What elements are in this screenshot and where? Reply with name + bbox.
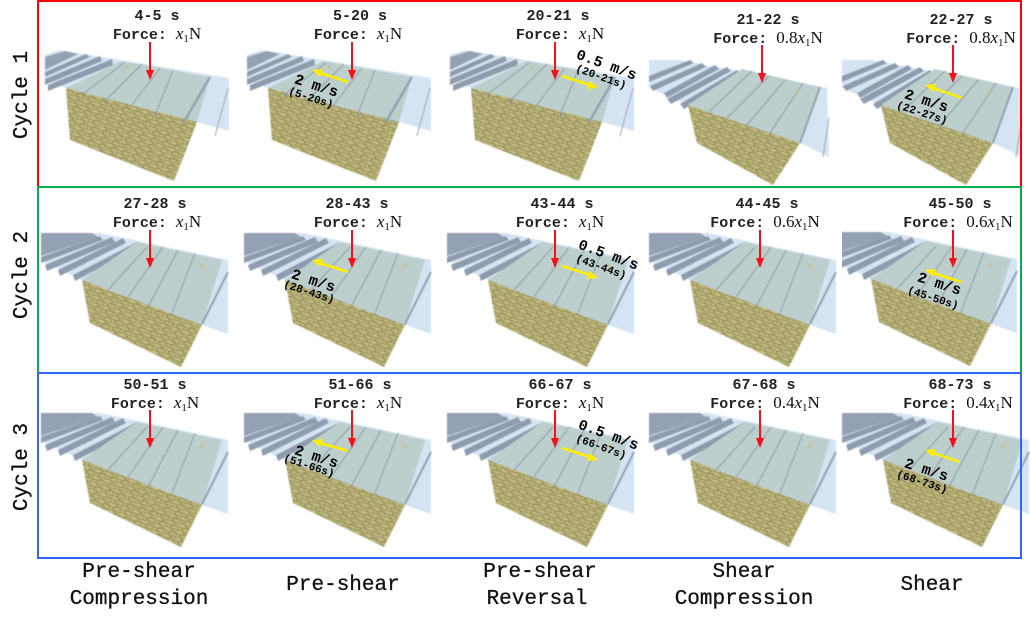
label: 5-20 s [314, 8, 402, 45]
label: 20-21 s [516, 8, 604, 45]
shear arrow 20-21 s [562, 47, 639, 93]
row label: cycle 2: Cycle 2 [11, 231, 34, 319]
label: 22-27 s: 22-27 s [929, 12, 993, 29]
label: 20-21 s: 20-21 s [526, 8, 590, 25]
border: cycle 1 [38, 1, 1021, 187]
label: 21-22 s: 1 [805, 37, 811, 49]
label: 45-50 s [903, 196, 1013, 233]
label: 28-43 s [314, 196, 402, 233]
label: 28-43 s: N [390, 212, 402, 231]
shear arrow 28-43 s [282, 259, 348, 307]
label: 66-67 s: Force: x [516, 393, 586, 413]
label: 5-20 s: Force: x [314, 24, 384, 44]
label: cycle 1 timing and force 4-5 s: Force: x [113, 24, 183, 44]
label: 21-22 s [713, 12, 823, 49]
column label: shear: Shear [900, 574, 964, 597]
force arrow 3 [551, 42, 559, 80]
row label: cycle 1: Cycle 1 [11, 51, 34, 139]
shear arrow 43-44 s: 0.5 m/s [576, 237, 641, 274]
label: cycle 1 timing and force 4-5 s [113, 8, 201, 45]
force arrow 1 [146, 42, 154, 80]
shear arrow 20-21 s: 0.5 m/s [574, 47, 639, 84]
border: cycle 2 [38, 187, 1021, 373]
label: 28-43 s: 1 [384, 221, 390, 233]
label: 68-73 s: 68-73 s [928, 377, 992, 394]
column label: pre-shear compression: Compression [70, 588, 208, 611]
label: 67-68 s: N [808, 393, 820, 412]
label: 5-20 s: 1 [384, 33, 390, 45]
label: 51-66 s: Force: x [314, 393, 384, 413]
label: 27-28 s: 1 [183, 221, 189, 233]
shear arrow 43-44 s [562, 237, 641, 283]
scene 66-67 s [447, 413, 634, 547]
scene 68-73 s [842, 413, 1029, 547]
force arrow 3 [551, 230, 559, 268]
shear arrow 66-67 s [562, 417, 641, 463]
label: 68-73 s: 1 [995, 402, 1001, 414]
label: 45-50 s: Force: 0.6x [903, 212, 995, 232]
border: cycle 3 [38, 373, 1021, 558]
label: 44-45 s: 44-45 s [735, 196, 799, 213]
shear arrow 22-27 s: (22-27s) [895, 100, 949, 128]
row label: cycle 3: Cycle 3 [11, 423, 34, 511]
label: 51-66 s: 1 [384, 402, 390, 414]
force arrow 2 [348, 230, 356, 268]
label: 27-28 s: Force: x [113, 212, 183, 232]
label: 22-27 s [906, 12, 1016, 49]
label: 27-28 s: 27-28 s [123, 196, 187, 213]
shear arrow 22-27 s [895, 84, 962, 128]
shear arrow 51-66 s: (51-66s) [282, 453, 336, 481]
column label: shear compression: Shear [712, 561, 776, 584]
label: 28-43 s: Force: x [314, 212, 384, 232]
scene 21-22 s [649, 60, 829, 185]
shear arrow 5-20 s [287, 69, 348, 112]
panel: cycle 1 [45, 8, 1022, 185]
force arrow 1 [146, 230, 154, 268]
label: cycle 1 timing and force 4-5 s: N [189, 24, 201, 43]
label: 66-67 s: 1 [586, 402, 592, 414]
label: 22-27 s: 1 [998, 37, 1004, 49]
shear arrow 20-21 s: (20-21s) [574, 63, 628, 93]
column label: pre-shear reversal [483, 561, 597, 611]
label: 50-51 s: Force: x [111, 393, 181, 413]
label: 21-22 s: N [811, 28, 823, 47]
label: 43-44 s: N [592, 212, 604, 231]
label: 68-73 s: N [1001, 393, 1013, 412]
label: 50-51 s: 1 [181, 402, 187, 414]
label: 43-44 s: 1 [586, 221, 592, 233]
label: 50-51 s [111, 377, 199, 414]
label: 44-45 s [710, 196, 820, 233]
label: 66-67 s: N [592, 393, 604, 412]
label: 68-73 s [903, 377, 1013, 414]
shear arrow 45-50 s: 2 m/s [915, 270, 963, 300]
scene 45-50 s [830, 232, 1017, 366]
shear arrow 5-20 s: 2 m/s [292, 72, 340, 102]
label: 44-45 s: Force: 0.6x [710, 212, 802, 232]
scene 20-21 s [450, 50, 634, 181]
column label: shear compression [675, 561, 813, 611]
label: 20-21 s: N [592, 24, 604, 43]
label: 22-27 s: N [1004, 28, 1016, 47]
label: 5-20 s: 5-20 s [333, 8, 387, 25]
label: 43-44 s: Force: x [516, 212, 586, 232]
force arrow 4 [756, 410, 764, 448]
shear arrow 28-43 s: 2 m/s [289, 267, 337, 297]
shear arrow 45-50 s: (45-50s) [906, 285, 960, 313]
force arrow 1 [146, 410, 154, 448]
shear arrow 68-73 s: 2 m/s [902, 456, 950, 486]
label: 5-20 s: N [390, 24, 402, 43]
force arrow 2 [348, 410, 356, 448]
shear arrow 45-50 s [906, 269, 963, 313]
label: 45-50 s: 1 [995, 221, 1001, 233]
panel: cycle 2 [41, 196, 1017, 367]
shear arrow 43-44 s: (43-44s) [574, 253, 628, 283]
force arrow 5 [949, 230, 957, 268]
shear arrow 51-66 s [282, 439, 348, 481]
shear arrow 22-27 s: 2 m/s [902, 87, 950, 117]
force arrow 5 [949, 45, 957, 83]
label: 20-21 s: 1 [586, 33, 592, 45]
label: 67-68 s: 1 [802, 402, 808, 414]
shear arrow 28-43 s: (28-43s) [282, 279, 336, 307]
label: 21-22 s: Force: 0.8x [713, 28, 805, 48]
label: 66-67 s: 66-67 s [528, 377, 592, 394]
label: 43-44 s: 43-44 s [530, 196, 594, 213]
label: 44-45 s: N [808, 212, 820, 231]
column label: pre-shear compression [70, 561, 208, 611]
shear arrow 51-66 s: 2 m/s [292, 443, 340, 473]
label: 67-68 s [710, 377, 820, 414]
label: cycle 1 timing and force 4-5 s: 4-5 s [134, 8, 180, 25]
force arrow 5 [949, 410, 957, 448]
label: 50-51 s: 50-51 s [123, 377, 187, 394]
scene 22-27 s [842, 60, 1022, 185]
label: 27-28 s [113, 196, 201, 233]
column label: pre-shear: Pre-shear [286, 574, 400, 597]
label: 67-68 s: 67-68 s [732, 377, 796, 394]
label: 51-66 s [314, 377, 402, 414]
label: 21-22 s: 21-22 s [736, 12, 800, 29]
scene 4-5 s [45, 50, 229, 181]
column label: pre-shear compression: Pre-shear [82, 561, 196, 584]
label: 67-68 s: Force: 0.4x [710, 393, 802, 413]
label: cycle 1 timing and force 4-5 s: 1 [183, 33, 189, 45]
force arrow 4 [756, 230, 764, 268]
label: 22-27 s: Force: 0.8x [906, 28, 998, 48]
scene 27-28 s [41, 233, 228, 367]
force arrow 4 [758, 45, 766, 83]
column label: pre-shear reversal: Pre-shear [483, 561, 597, 584]
label: 28-43 s: 28-43 s [325, 196, 389, 213]
scene 5-20 s [247, 50, 431, 181]
panel: cycle 3 [41, 377, 1029, 547]
label: 50-51 s: N [187, 393, 199, 412]
scene 67-68 s [649, 413, 836, 547]
label: 20-21 s: Force: x [516, 24, 586, 44]
force arrow 2 [348, 42, 356, 80]
shear arrow 68-73 s [895, 449, 960, 497]
label: 44-45 s: 1 [802, 221, 808, 233]
shear arrow 5-20 s: (5-20s) [287, 86, 334, 112]
label: 51-66 s: 51-66 s [328, 377, 392, 394]
label: 45-50 s: N [1001, 212, 1013, 231]
scene 28-43 s [244, 233, 431, 367]
label: 68-73 s: Force: 0.4x [903, 393, 995, 413]
force arrow 3 [551, 410, 559, 448]
shear arrow 66-67 s: (66-67s) [574, 433, 628, 463]
label: 45-50 s: 45-50 s [928, 196, 992, 213]
label: 27-28 s: N [189, 212, 201, 231]
label: 66-67 s [516, 377, 604, 414]
scene 51-66 s [244, 413, 431, 547]
scene 44-45 s [649, 233, 836, 367]
label: 51-66 s: N [390, 393, 402, 412]
shear arrow 66-67 s: 0.5 m/s [576, 417, 641, 454]
column label: pre-shear reversal: Reversal [487, 588, 587, 611]
scene 43-44 s [447, 233, 634, 367]
scene 50-51 s [41, 413, 228, 547]
column label: shear compression: Compression [675, 588, 813, 611]
shear arrow 68-73 s: (68-73s) [895, 469, 949, 497]
label: 43-44 s [516, 196, 604, 233]
